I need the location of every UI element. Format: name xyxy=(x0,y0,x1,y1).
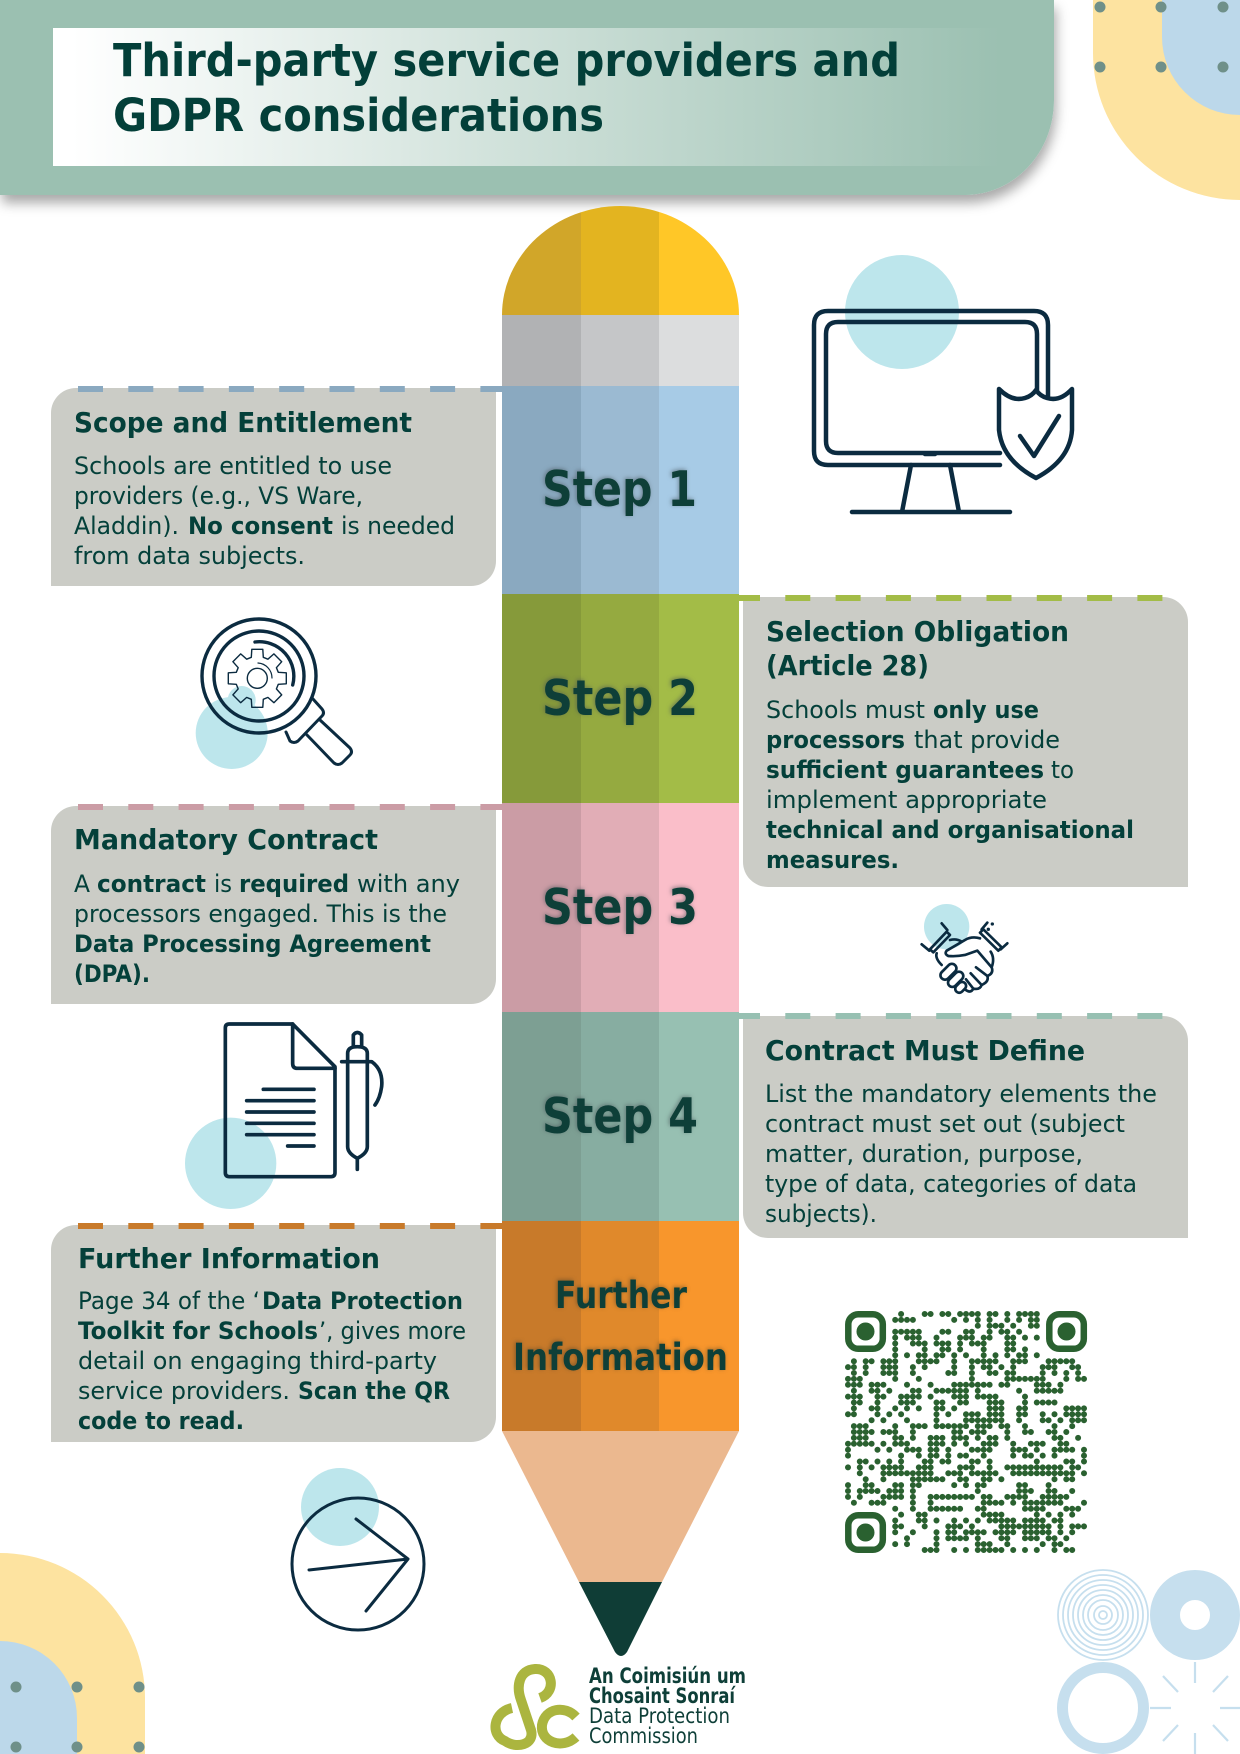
step 4 segment: Step 4 xyxy=(542,1088,698,1145)
step 1 segment: Step 1 xyxy=(542,461,697,518)
heading: (Article 28) xyxy=(766,650,929,682)
further information segment xyxy=(502,1221,739,1431)
logo text: Commission xyxy=(589,1724,698,1748)
body text: required xyxy=(239,870,349,898)
body text: Data Processing Agreement xyxy=(74,930,431,958)
pencil eraser xyxy=(502,206,739,315)
decoration: bottom-right rings and starburst xyxy=(1058,1570,1240,1754)
body text: type of data, categories of data xyxy=(765,1170,1137,1198)
body text: detail on engaging third-party xyxy=(78,1347,437,1375)
body text: only use xyxy=(933,696,1039,724)
body text: that provide xyxy=(914,726,1060,754)
body text: is needed xyxy=(341,512,455,540)
step 1 segment xyxy=(502,386,739,594)
heading: Mandatory Contract xyxy=(74,824,378,856)
body text: measures. xyxy=(766,846,899,874)
body text: technical and organisational xyxy=(766,816,1134,844)
further information segment: Information xyxy=(513,1336,728,1379)
icon: handshake xyxy=(922,904,1007,994)
body text: from data subjects. xyxy=(74,542,305,570)
logo text: Chosaint Sonraí xyxy=(589,1684,736,1708)
heading: Contract Must Define xyxy=(765,1035,1085,1067)
title: Third-party service providers and xyxy=(113,34,900,87)
heading: Scope and Entitlement xyxy=(74,407,412,439)
body text: Schools are entitled to use xyxy=(74,452,392,480)
panel: further information xyxy=(51,1225,503,1442)
body text: providers (e.g., VS Ware, xyxy=(74,482,363,510)
body text: Scan the QR xyxy=(298,1377,450,1405)
step 4 segment xyxy=(502,1012,739,1221)
logo text: Data Protection xyxy=(589,1704,730,1728)
body text: No consent xyxy=(188,512,333,540)
icon: magnifying glass with gear xyxy=(196,619,352,769)
body text: Schools must xyxy=(766,696,925,724)
icon: arrow in circle xyxy=(292,1468,424,1630)
body text: service providers. xyxy=(78,1377,290,1405)
step 2 segment: Step 2 xyxy=(542,670,698,727)
panel: scope and entitlement xyxy=(51,388,503,586)
body text: code to read. xyxy=(78,1407,244,1435)
body text: processors engaged. This is the xyxy=(74,900,447,928)
step 3 segment xyxy=(502,803,739,1012)
heading: Selection Obligation xyxy=(766,616,1069,648)
pencil wood tip xyxy=(502,1431,739,1582)
body text: matter, duration, purpose, xyxy=(765,1140,1083,1168)
body text: Toolkit for Schools xyxy=(78,1317,318,1345)
decoration: top-right circles and dots xyxy=(1093,0,1240,200)
step 3 segment: Step 3 xyxy=(542,879,698,936)
body text: ’, gives more xyxy=(319,1317,466,1345)
body text: subjects). xyxy=(765,1200,877,1228)
QR code xyxy=(848,1314,1084,1550)
panel: mandatory contract xyxy=(51,806,503,1004)
body text: Page 34 of the ‘ xyxy=(78,1287,260,1315)
body text: processors xyxy=(766,726,905,754)
header banner xyxy=(0,0,1054,195)
title: GDPR considerations xyxy=(113,89,604,142)
body text: (DPA). xyxy=(74,960,150,988)
logo: Data Protection Commission xyxy=(495,1664,753,1748)
body text: is xyxy=(214,870,232,898)
logo symbol xyxy=(495,1669,576,1745)
title box xyxy=(53,28,1000,166)
pencil lead xyxy=(579,1582,662,1656)
step 2 segment xyxy=(502,594,739,803)
icon: monitor with shield xyxy=(814,255,1072,512)
body text: contract must set out (subject xyxy=(765,1110,1125,1138)
icon: document and pen xyxy=(185,1024,382,1209)
further information segment: Further xyxy=(555,1274,688,1317)
body text: contract xyxy=(97,870,206,898)
body text: with any xyxy=(357,870,460,898)
panel: selection obligation xyxy=(738,597,1188,887)
pencil xyxy=(502,206,739,1656)
body text: to xyxy=(1051,756,1074,784)
body text: implement appropriate xyxy=(766,786,1047,814)
panel: contract must define xyxy=(738,1016,1188,1238)
decoration: bottom-left circles and dots xyxy=(0,1553,145,1754)
body text: Aladdin). xyxy=(74,512,179,540)
body text: List the mandatory elements the xyxy=(765,1080,1157,1108)
pencil ferrule xyxy=(502,315,739,386)
logo text: An Coimisiún um xyxy=(589,1664,746,1688)
body text: sufficient guarantees xyxy=(766,756,1044,784)
heading: Further Information xyxy=(78,1243,380,1275)
body text: A xyxy=(74,870,91,898)
body text: Data Protection xyxy=(262,1287,463,1315)
